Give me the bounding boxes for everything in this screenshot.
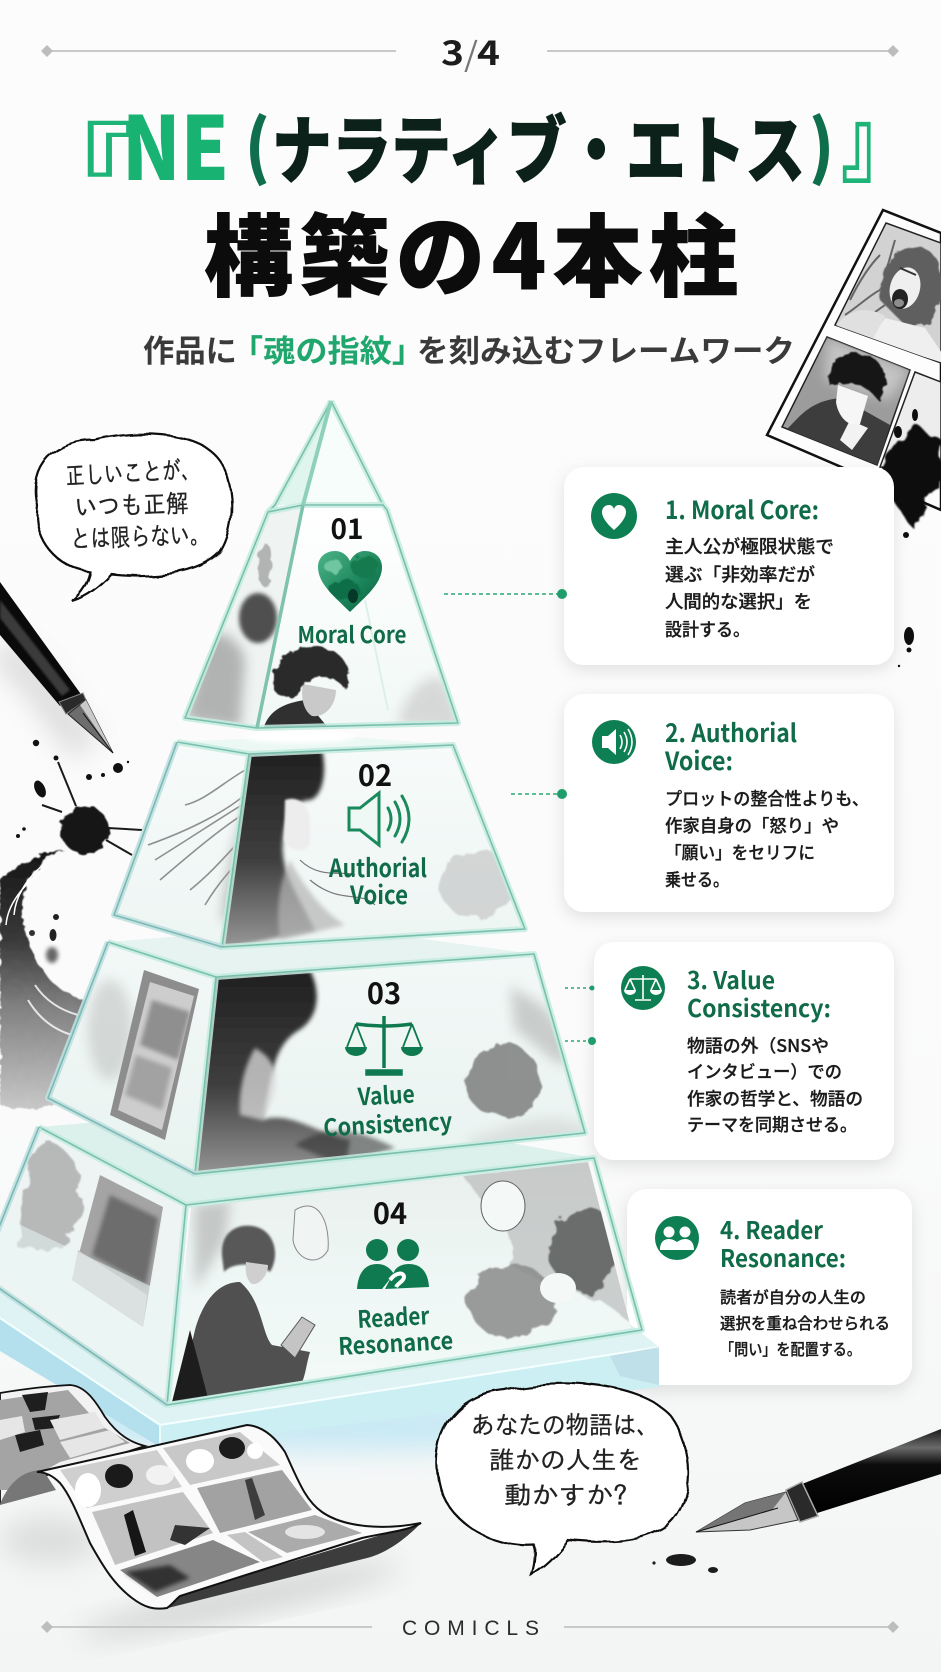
card 2: Authorial Voice: Voice: [664,742,733,778]
icon: speaker [592,720,636,764]
text: Authorial Voice: Authorial [328,849,427,885]
text: Reader Resonance [336,1295,454,1362]
icon: heart [591,493,637,539]
subtitle: 「魂の指紋」 [231,326,424,371]
card 4: Reader Resonance: 読者が自分の人生の [720,1284,866,1308]
speech bubble: upper left: とは限らない。 [70,522,210,552]
speech bubble: lower: あなたの物語は、 [471,1413,660,1438]
pyramid tier 4 [0,1105,642,1405]
card 1: Moral Core: 選ぶ「非効率だが [665,561,815,587]
icon: scales [621,966,665,1010]
title line 2: 構築の4本柱 [204,186,738,315]
text: Reader Resonance: Resonance [337,1321,454,1362]
text: Moral Core: Moral Core [298,616,406,650]
manga page: top right [767,210,941,510]
text: Value Consistency: Consistency [322,1102,453,1143]
speech bubble: lower [436,1384,689,1574]
footer: brand rule [41,1617,899,1640]
speech bubble: lower: 動かすか? [504,1483,627,1508]
speech bubble: lower: 誰かの人生を [489,1448,642,1473]
text: Authorial Voice [328,849,427,912]
connector: tier 3 to card 3 [565,986,596,1045]
text: 04: 04 [373,1191,407,1233]
icon: watercolour heart [318,551,382,612]
header: page number rule: 3 [441,27,464,75]
icon: two readers [357,1239,429,1289]
card 2: Authorial Voice: 2. Authorial [665,714,797,750]
text: 03: 03 [367,971,401,1013]
card 2: Authorial Voice: 乗せる。 [665,867,729,892]
fountain pen: upper left [0,582,113,753]
header: page number rule [41,27,899,76]
text: 01: 01 [330,508,364,548]
card 2: Authorial Voice: プロットの整合性よりも、 [665,786,869,811]
icon: speaker with waves [349,793,409,845]
card 4: Reader Resonance [627,1189,912,1385]
speech bubble: upper left [35,434,232,601]
text: Reader Resonance: Reader [356,1296,431,1335]
card 3: Value Consistency: 物語の外（SNSや [687,1033,829,1058]
text: Value Consistency [321,1073,453,1143]
footer: brand rule: COMICLS [402,1617,539,1640]
speech bubble: upper left: いつも正解 [74,491,189,520]
header: page number rule: / [464,28,478,76]
card 1: Moral Core: 人間的な選択」を [665,588,812,614]
speech bubble: upper left: 正しいことが、 [65,457,201,489]
header: page number rule: 4 [477,27,500,75]
text: Value Consistency: Value [356,1075,416,1113]
card 1: Moral Core: 1. Moral Core: [665,491,819,527]
ink blot: top right [876,409,941,667]
ink splatter and brush swirl [0,740,142,1109]
card 1: Moral Core: 設計する。 [665,616,750,642]
icon: people [655,1216,699,1260]
card 3: Value Consistency: インタビュー）での [687,1059,842,1084]
connector: tier 2 to card 2 [511,789,567,799]
glass base plate [0,1270,660,1451]
card 4: Reader Resonance: 4. Reader [720,1211,823,1246]
card 4: Reader Resonance: Resonance: [720,1239,846,1274]
card 2: Authorial Voice: 作家自身の「怒り」や [665,813,839,838]
text: Authorial Voice: Voice [349,876,408,912]
manga film strip: back [0,1385,145,1505]
manga film strip: front [0,1425,421,1648]
title line 1: NE [122,79,229,206]
ink drops under pen [652,1554,718,1573]
title line 1: ナラティブ・エトス [272,92,805,199]
subtitle: を刻み込むフレームワーク [417,326,795,371]
card 3: Value Consistency [594,942,894,1160]
title line 1: ) [809,92,834,193]
card 3: Value Consistency: 3. Value [687,961,775,996]
text: 02: 02 [358,753,392,795]
card 2: Authorial Voice: 「願い」をセリフに [665,840,815,865]
card 2: Authorial Voice [564,694,894,912]
card 3: Value Consistency: 作家の哲学と、物語の [687,1086,863,1111]
card 4: Reader Resonance: 選択を重ね合わせられる [720,1310,890,1334]
card 3: Value Consistency: Consistency: [687,989,831,1024]
glow between tier 1 and tier 2 [245,731,355,743]
title line 1: 』 [841,68,915,201]
card 1: Moral Core [564,467,894,665]
fountain pen: lower right [696,1429,941,1532]
subtitle [143,326,795,371]
title line 1: 『 [17,97,135,218]
pyramid tier 3 [48,925,590,1180]
pyramid tier 1 [185,401,465,730]
pyramid tier 2 [114,735,525,950]
card 1: Moral Core: 主人公が極限状態で [665,533,834,559]
title line 1: ( [245,92,270,193]
card 4: Reader Resonance: 「問い」を配置する。 [720,1336,861,1360]
connector: tier 1 to card 1 [444,589,567,599]
title line 1 [17,68,915,218]
subtitle: 作品に [143,326,237,371]
icon: scales of justice [345,1016,423,1074]
card 3: Value Consistency: テーマを同期させる。 [687,1112,857,1137]
